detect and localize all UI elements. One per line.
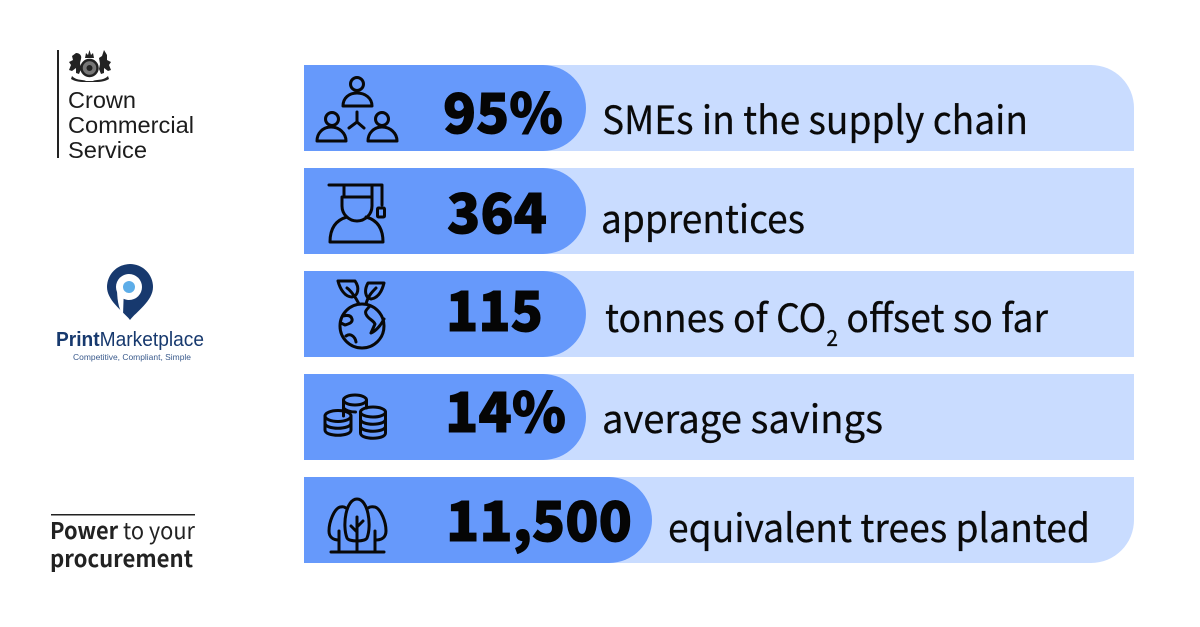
icon: coin stacks	[325, 395, 386, 438]
label: apprentices: apprentices	[601, 189, 805, 245]
label: equivalent trees planted: equivalent trees planted	[668, 498, 1090, 554]
icon: map pin	[107, 264, 153, 320]
tagline: Power to your procurement: procurement	[50, 540, 193, 574]
row: trees	[304, 477, 1134, 563]
row: SMEs	[304, 65, 1134, 151]
icon: trees	[329, 499, 386, 552]
text: tagline: Competitive, Compliant, Simple	[73, 352, 191, 362]
row: apprentices	[304, 168, 1134, 254]
tagline: Power to your procurement	[50, 512, 195, 574]
stat: 14%: 14%	[445, 368, 566, 448]
stat: 95%: 95%	[443, 69, 563, 149]
stat: 11,500: 11,500	[446, 477, 632, 557]
text: Crown Commercial Service: Commercial	[68, 112, 194, 138]
stat: 364: 364	[447, 169, 547, 249]
row: savings	[304, 368, 1134, 460]
stat: 115: 115	[446, 267, 543, 347]
label: average savings: average savings	[602, 389, 883, 445]
text: Crown Commercial Service: Service	[68, 137, 147, 163]
icon: graduate	[329, 185, 384, 242]
row: CO2	[304, 267, 1134, 357]
label: tonnes of CO2 offset so far: 2	[826, 321, 838, 353]
icon: royal crest	[69, 50, 111, 82]
label: SMEs in the supply chain: SMEs in the supply chain	[602, 90, 1028, 146]
label: tonnes of CO2 offset so far: tonnes of CO	[605, 288, 837, 344]
icon: globe with leaves	[338, 281, 384, 348]
tagline: Power to your procurement: Power to your	[50, 512, 195, 546]
label: tonnes of CO2 offset so far: offset so far	[838, 288, 1049, 344]
text: Crown Commercial Service	[68, 87, 194, 163]
text: PrintMarketplace: PrintMarketplace	[56, 329, 204, 351]
logo: Crown Commercial Service	[57, 50, 194, 163]
text: Crown Commercial Service: Crown	[68, 87, 136, 113]
icon: people network	[317, 78, 397, 141]
logo: Print Marketplace	[56, 264, 204, 362]
